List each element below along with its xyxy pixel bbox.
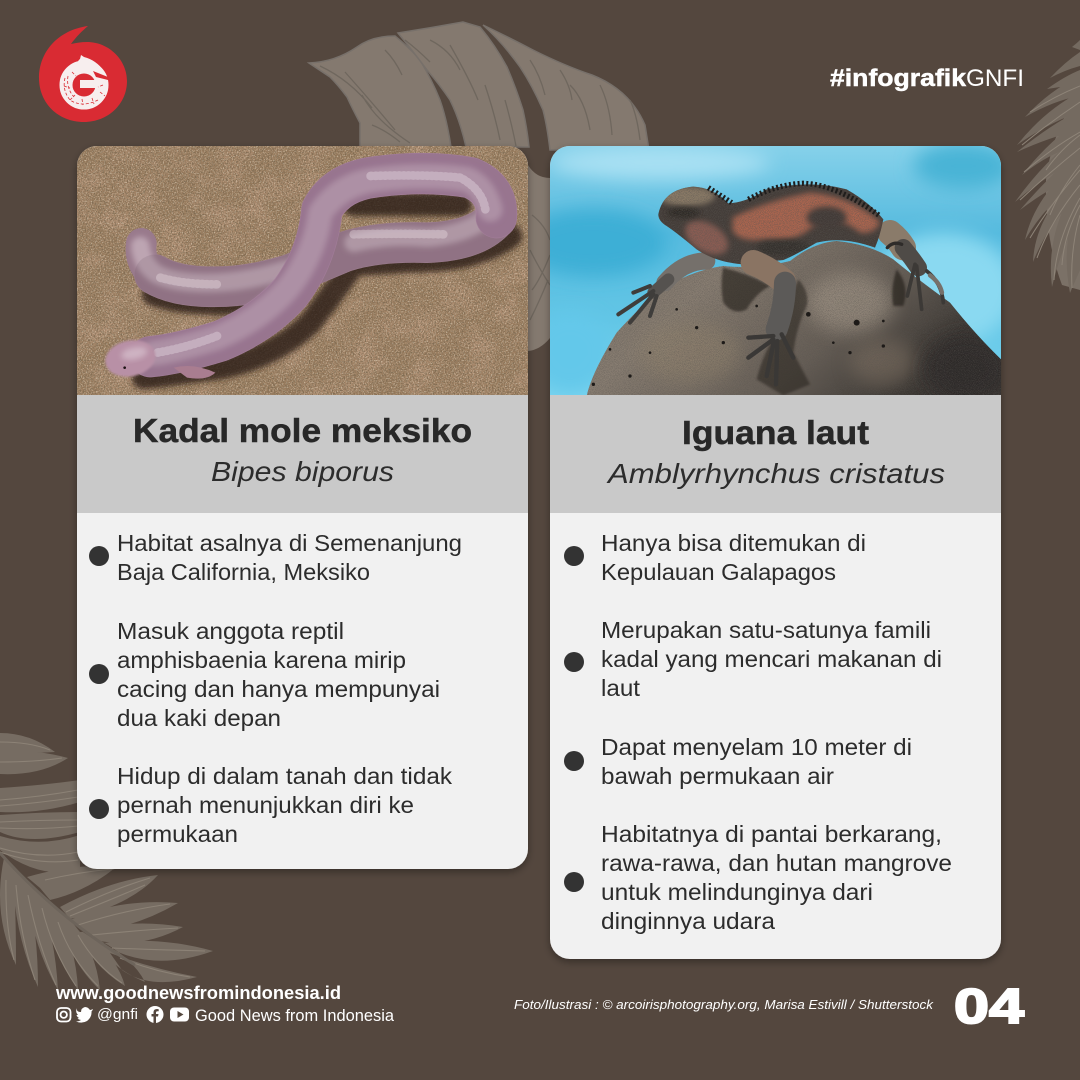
iguana body	[658, 184, 883, 264]
fact 3: bawah permukaan air	[601, 763, 834, 789]
card background	[550, 146, 1001, 959]
fact 2: dua kaki depan	[117, 705, 281, 731]
fact 3: pernah menunjukkan diri ke	[117, 792, 414, 818]
fact 4: Habitatnya di pantai berkarang,	[601, 821, 942, 847]
fact 2	[89, 618, 440, 731]
heading band	[77, 395, 528, 513]
page number: 04	[954, 980, 1024, 1034]
hashtag: GNFI	[966, 65, 1024, 92]
fact 2: laut	[601, 675, 640, 701]
photo: mole lizard on sand	[77, 146, 528, 395]
iguana crest	[708, 183, 880, 216]
fact 2: kadal yang mencari makanan di	[601, 646, 942, 672]
fact 3: Hidup di dalam tanah dan tidak	[117, 763, 452, 789]
fact 2: cacing dan hanya mempunyai	[117, 676, 440, 702]
fact 3: permukaan	[117, 821, 238, 847]
rock	[586, 241, 1001, 395]
fact 1: Kepulauan Galapagos	[601, 559, 836, 585]
icon: instagram	[57, 1008, 70, 1022]
social handle: @gnfi	[97, 1006, 138, 1023]
page name: Good News from Indonesia	[195, 1006, 395, 1025]
decorative palm leaf top right	[1015, 40, 1080, 293]
fact 1: Baja California, Meksiko	[117, 559, 370, 585]
icon: youtube	[170, 1008, 189, 1022]
hashtag: #infografik	[830, 65, 967, 92]
decorative palm leaf bottom left	[0, 733, 213, 990]
heading: common name: Iguana laut	[682, 414, 869, 451]
heading: common name: Kadal mole meksiko	[133, 412, 472, 449]
panel: Kadal mole meksiko	[77, 146, 528, 869]
iguana rear leg	[887, 233, 943, 309]
fact 3	[89, 763, 452, 847]
icon: facebook	[146, 1006, 164, 1023]
website: www.goodnewsfromindonesia.id	[55, 982, 341, 1003]
photo: marine iguana on rock	[550, 146, 1001, 395]
panel: Iguana laut	[520, 143, 1017, 959]
fact 4	[564, 821, 952, 934]
logo red drop	[39, 26, 127, 122]
iguana left foreleg	[618, 261, 707, 323]
decorative monstera leaf top centre	[309, 22, 649, 351]
fact 2: Masuk anggota reptil	[117, 618, 344, 644]
logo emblem	[64, 55, 108, 105]
worm shadow	[144, 204, 510, 378]
heading band	[550, 395, 1001, 513]
hashtag	[830, 65, 1024, 92]
fact 1: Habitat asalnya di Semenanjung	[117, 530, 462, 556]
heading: latin name: Amblyrhynchus cristatus	[606, 458, 945, 489]
fact 1: Hanya bisa ditemukan di	[601, 530, 866, 556]
heading: latin name: Bipes biporus	[211, 456, 394, 487]
worm head	[104, 338, 156, 378]
photo credit: Foto/Ilustrasi : © arcoirisphotography.org, Marisa Estivill / Shutterstock	[514, 998, 934, 1012]
iguana orange back	[658, 184, 884, 264]
logo	[39, 26, 127, 122]
worm back section	[140, 216, 496, 287]
fact 4: dinginnya udara	[601, 908, 776, 934]
fact 1	[89, 530, 462, 585]
fact 2	[564, 617, 942, 701]
worm front section	[150, 174, 497, 357]
card background	[77, 146, 528, 869]
icon: twitter	[76, 1007, 93, 1023]
footer: website and socials	[55, 982, 395, 1025]
fact 2: Merupakan satu-satunya famili	[601, 617, 931, 643]
fact 1	[564, 530, 866, 585]
fact 4: rawa-rawa, dan hutan mangrove	[601, 850, 952, 876]
fact 3: Dapat menyelam 10 meter di	[601, 734, 912, 760]
fact 3	[564, 734, 912, 789]
rock shadows	[722, 266, 906, 395]
fact 2: amphisbaenia karena mirip	[117, 647, 406, 673]
fact 4: untuk melindunginya dari	[601, 879, 873, 905]
iguana centre leg	[748, 263, 793, 384]
